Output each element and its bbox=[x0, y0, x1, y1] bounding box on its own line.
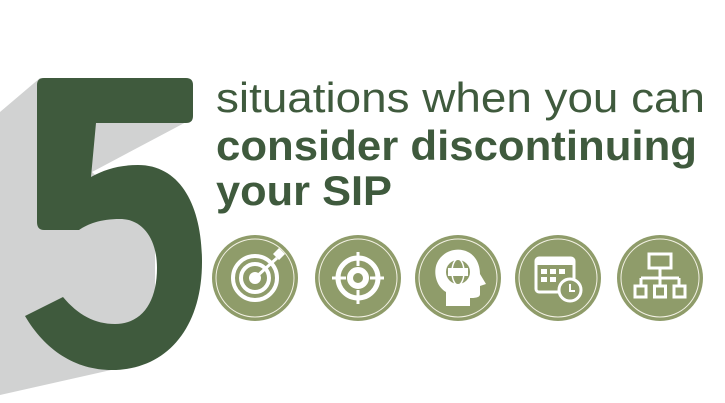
shadow of number 5 bbox=[0, 78, 190, 395]
title: consider discontinuing bbox=[216, 122, 697, 169]
icon: crosshair target bbox=[315, 235, 401, 321]
icon: target with arrow bbox=[212, 235, 298, 321]
icon: head with globe bbox=[415, 235, 501, 321]
title bbox=[216, 74, 705, 214]
icon: hierarchy chart bbox=[617, 235, 703, 321]
title: your SIP bbox=[216, 167, 392, 214]
icon: calendar with clock bbox=[515, 235, 601, 321]
icon row bbox=[212, 235, 703, 321]
title: situations when you can bbox=[216, 74, 705, 121]
big number 5 bbox=[25, 78, 202, 370]
